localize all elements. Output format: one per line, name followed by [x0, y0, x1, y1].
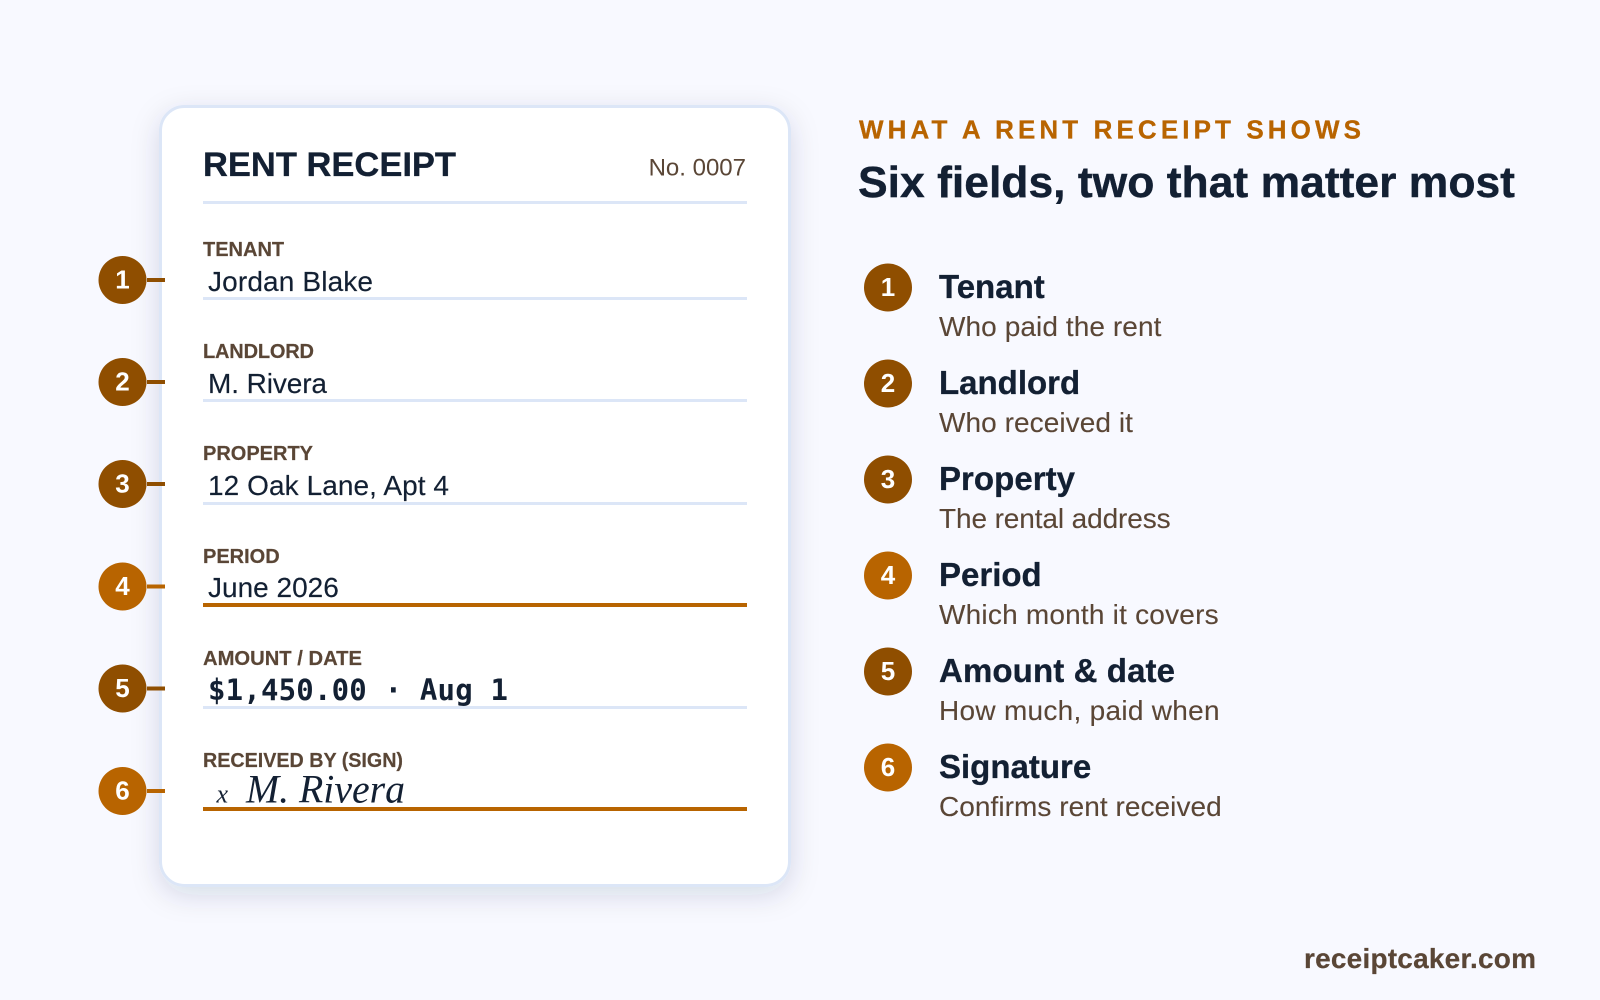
- field 2: landlord: [203, 341, 747, 402]
- legend item 5: amount and date: Amount & date: [939, 652, 1175, 689]
- callout badge 5: 5: [115, 673, 130, 703]
- receipt number: No. 0007: [649, 154, 746, 182]
- field 3: property: [203, 443, 747, 505]
- callout badge 3: 3: [115, 468, 130, 498]
- field 5: amount and date: [203, 648, 747, 709]
- main heading: Six fields, two that matter most: [858, 158, 1515, 207]
- legend item 4: period: Period: [939, 556, 1042, 593]
- legend item 3: property: The rental address: [939, 503, 1171, 534]
- field 5: amount and date: AMOUNT / DATE: [203, 648, 362, 670]
- field 1: tenant: [203, 239, 747, 300]
- callout badge 4: 4: [115, 571, 130, 601]
- legend item 1: tenant: Tenant: [939, 268, 1045, 305]
- legend item 4: period: [864, 552, 1219, 630]
- legend item 3: property: [864, 456, 1171, 534]
- field 6: signature: M. Rivera: [245, 766, 405, 812]
- legend item 5: amount and date: [864, 648, 1220, 726]
- legend item 2: landlord: Who received it: [939, 407, 1133, 438]
- callout badge 6: 6: [115, 776, 130, 806]
- legend item 2: landlord: [864, 360, 1133, 438]
- field 5: amount and date: $1,450.00 · Aug 1: [208, 673, 508, 707]
- field 6: signature: RECEIVED BY (SIGN): [203, 750, 403, 772]
- field 3: property: PROPERTY: [203, 443, 314, 465]
- field 2: landlord: M. Rivera: [208, 368, 327, 399]
- legend item 6: signature: [864, 744, 1222, 822]
- callout badge 2: 2: [115, 366, 130, 396]
- legend item 6: signature: Signature: [939, 748, 1091, 785]
- field 4: period: PERIOD: [203, 546, 280, 568]
- legend item 2: landlord: Landlord: [939, 364, 1080, 401]
- legend item 1: tenant: Who paid the rent: [939, 311, 1162, 342]
- field 6: signature: [203, 750, 747, 812]
- legend item 3: property: 3: [881, 464, 895, 494]
- callout badge 6: [98, 767, 165, 815]
- field 4: period: June 2026: [208, 572, 339, 603]
- callout badge 2: [98, 358, 165, 406]
- field 4: period: [203, 546, 747, 607]
- legend item 5: amount and date: 5: [881, 656, 895, 686]
- callout badge 3: [98, 460, 165, 508]
- legend item 3: property: Property: [939, 460, 1076, 497]
- legend item 1: tenant: [864, 264, 1162, 342]
- callout badge 1: [98, 256, 165, 304]
- field 6: signature: x: [216, 780, 228, 808]
- panel: receipt card: [160, 106, 790, 886]
- eyebrow heading: WHAT A RENT RECEIPT SHOWS: [859, 114, 1361, 144]
- receipt title: RENT RECEIPT: [203, 146, 456, 184]
- field 1: tenant: TENANT: [203, 239, 284, 261]
- legend item 6: signature: 6: [881, 752, 895, 782]
- field 1: tenant: Jordan Blake: [208, 266, 373, 297]
- callout badge 4: [98, 562, 165, 610]
- legend item 2: landlord: 2: [881, 368, 895, 398]
- callout badge 5: [98, 664, 165, 712]
- field 2: landlord: LANDLORD: [203, 341, 314, 363]
- field 3: property: 12 Oak Lane, Apt 4: [208, 470, 449, 501]
- legend item 1: tenant: 1: [881, 272, 895, 302]
- legend item 5: amount and date: How much, paid when: [939, 695, 1220, 726]
- legend item 4: period: 4: [881, 560, 896, 590]
- footer: website: receiptcaker.com: [1304, 943, 1536, 974]
- callout badge 1: 1: [115, 264, 130, 294]
- legend item 6: signature: Confirms rent received: [939, 791, 1222, 822]
- legend item 4: period: Which month it covers: [939, 599, 1219, 630]
